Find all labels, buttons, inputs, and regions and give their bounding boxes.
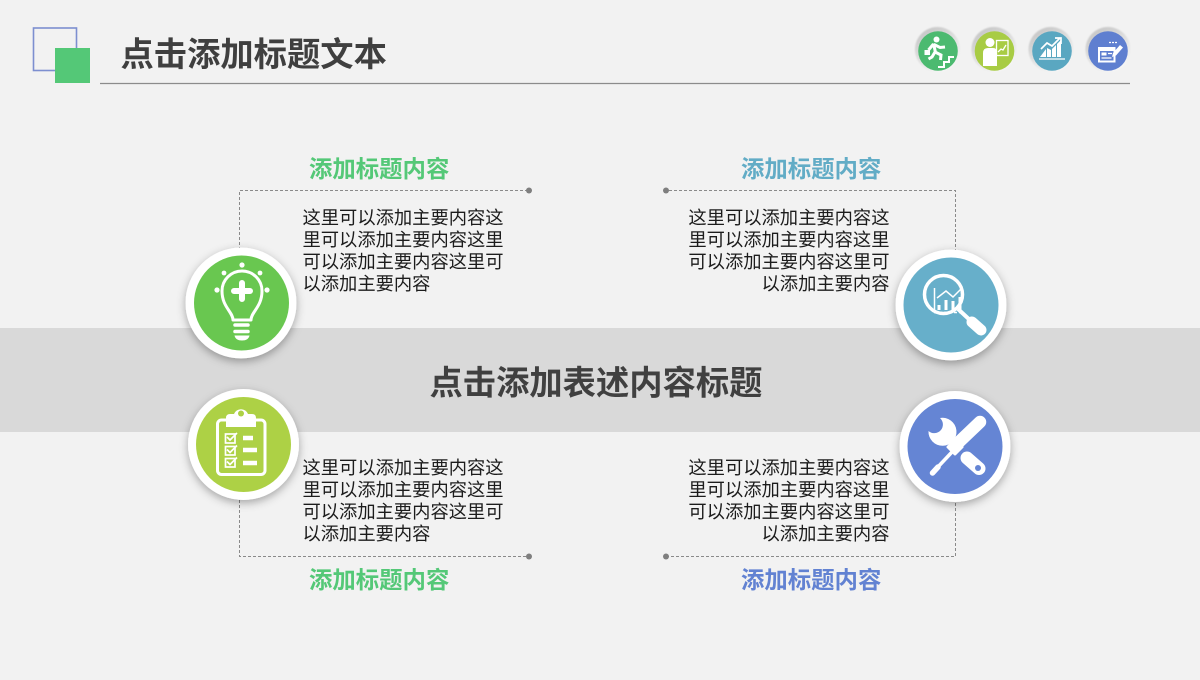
icon: wrench and screwdriver badge bbox=[900, 391, 1010, 502]
header logo squares bbox=[34, 28, 90, 83]
dashed connector: top left bbox=[240, 188, 532, 250]
title: 点击添加标题文本 bbox=[120, 37, 387, 74]
text block: bottom left bbox=[302, 457, 504, 544]
text block: top left: 这里可以添加主要内容这 bbox=[302, 207, 504, 228]
heading: bottom left: 添加标题内容 bbox=[309, 567, 449, 593]
text block: bottom left: 以添加主要内容 bbox=[302, 523, 430, 544]
header divider line bbox=[100, 82, 1130, 84]
text block: top left: 以添加主要内容 bbox=[302, 273, 430, 294]
text block: bottom left: 里可以添加主要内容这里 bbox=[302, 479, 504, 500]
text block: top right: 可以添加主要内容这里可 bbox=[688, 251, 890, 272]
heading: top right: 添加标题内容 bbox=[741, 156, 881, 182]
heading: bottom right: 添加标题内容 bbox=[741, 567, 881, 593]
text block: bottom left: 可以添加主要内容这里可 bbox=[302, 501, 504, 522]
icon: light bulb badge bbox=[186, 248, 296, 358]
text block: top left: 可以添加主要内容这里可 bbox=[302, 251, 504, 272]
text block: bottom right: 以添加主要内容 bbox=[762, 523, 890, 544]
text block: top right bbox=[688, 207, 890, 294]
center heading: 点击添加表述内容标题 bbox=[430, 366, 762, 402]
dashed connector: bottom right bbox=[663, 498, 956, 560]
icon: runner on stairs bbox=[915, 27, 960, 72]
text block: top right: 这里可以添加主要内容这 bbox=[688, 207, 890, 228]
text block: bottom left: 这里可以添加主要内容这 bbox=[302, 457, 504, 478]
text block: top right: 里可以添加主要内容这里 bbox=[688, 229, 890, 250]
center band bbox=[0, 328, 1200, 432]
icon: clipboard checklist badge bbox=[188, 389, 299, 500]
text block: bottom right: 可以添加主要内容这里可 bbox=[688, 501, 890, 522]
icon: magnifier chart badge bbox=[896, 250, 1006, 360]
icon: web page and pen bbox=[1086, 27, 1130, 72]
text block: bottom right bbox=[688, 457, 890, 544]
icon: presenter with board bbox=[972, 27, 1016, 72]
text block: top right: 以添加主要内容 bbox=[762, 273, 890, 294]
text block: bottom right: 里可以添加主要内容这里 bbox=[688, 479, 890, 500]
dashed connector: bottom left bbox=[240, 495, 532, 560]
dashed connector: top right bbox=[663, 188, 956, 252]
text block: top left: 里可以添加主要内容这里 bbox=[302, 229, 504, 250]
icon: rising chart bbox=[1028, 27, 1074, 72]
text block: top left bbox=[302, 207, 504, 294]
heading: top left: 添加标题内容 bbox=[309, 156, 449, 182]
text block: bottom right: 这里可以添加主要内容这 bbox=[688, 457, 890, 478]
